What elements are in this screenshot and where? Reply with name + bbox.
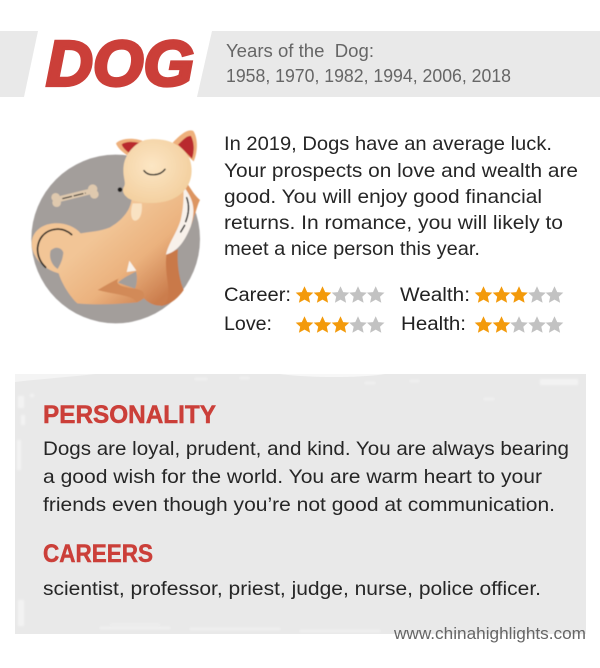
dog hind leg: [98, 279, 144, 302]
stars: health: [475, 316, 563, 333]
careers text: scientist, professor, priest, judge, nurse, police officer.: [43, 578, 541, 600]
dog far leg: [147, 249, 184, 306]
dog eye: [144, 169, 165, 175]
luck description: meet a nice person this year.: [224, 238, 480, 260]
website credit: www.chinahighlights.com: [393, 624, 586, 643]
luck description: returns. In romance, you will likely to: [224, 212, 563, 234]
personality text: friends even though you’re not good at communication.: [43, 494, 555, 516]
dog collar patch: [131, 203, 142, 221]
rating labels: Wealth:: [400, 285, 470, 306]
personality text: [43, 438, 569, 516]
personality text: a good wish for the world. You are warm heart to your: [43, 466, 543, 488]
personality text: Dogs are loyal, prudent, and kind. You are always bearing: [43, 438, 569, 460]
years of the dog: Years of the Dog:: [226, 41, 374, 61]
dog tail hole: [50, 248, 63, 269]
dog white chest: [166, 186, 194, 255]
dog fur marks: [38, 198, 189, 267]
dog body and tail: [32, 188, 187, 306]
illustration: dog in grey circle: [31, 130, 200, 323]
header band: left segment: [0, 31, 38, 97]
luck description: Your prospects on love and wealth are: [224, 160, 578, 182]
stars: career: [296, 286, 385, 303]
heading: personality: PERSONALITY: [43, 401, 216, 429]
years of the dog: 1958, 1970, 1982, 1994, 2006, 2018: [226, 66, 511, 86]
rating labels: [224, 285, 470, 335]
dog belly gap: [118, 271, 137, 289]
heading: careers: CAREERS: [43, 540, 153, 568]
dog nose: [118, 187, 122, 192]
icon: grey circle: [31, 155, 200, 323]
stars: love: [296, 316, 385, 333]
rating labels: Career:: [224, 285, 291, 306]
icon: bone: [51, 184, 99, 207]
title: DOG: DOG: [46, 28, 194, 100]
years of the dog: [226, 41, 511, 86]
luck description: In 2019, Dogs have an average luck.: [224, 133, 552, 155]
dog head: [123, 139, 192, 203]
stars: wealth: [475, 286, 563, 303]
dog white belly patch: [127, 261, 136, 272]
luck description: [224, 133, 578, 260]
header band: right segment: [197, 31, 600, 97]
rating labels: Health:: [401, 314, 466, 335]
luck description: good. You will enjoy good financial: [224, 186, 542, 208]
dog orange fringe: [168, 182, 200, 255]
dog ears: [116, 139, 147, 156]
panel: personality and careers: [15, 374, 586, 634]
rating labels: Love:: [224, 314, 272, 335]
